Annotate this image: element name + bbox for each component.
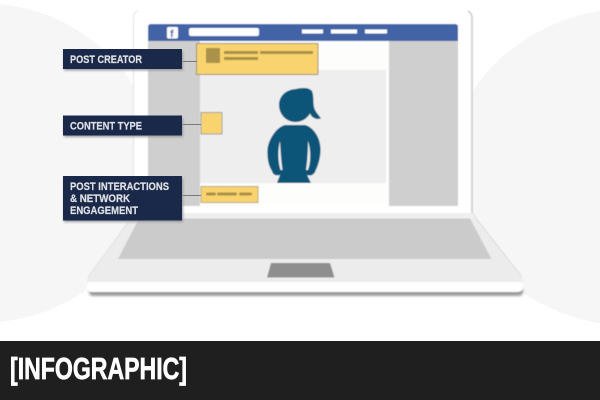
label: content type — [63, 116, 183, 137]
laptop base — [87, 213, 523, 296]
keyboard area — [118, 218, 492, 259]
icon: f logo: f — [170, 28, 174, 40]
laptop screen lid — [133, 10, 472, 213]
label: post interactions and network engagement: ENGAGEMENT — [70, 205, 138, 217]
social page: image area — [200, 70, 386, 183]
label: post interactions and network engagement: POST INTERACTIONS — [70, 181, 169, 193]
callout: interactions highlight — [201, 186, 258, 202]
head and ponytail — [279, 88, 321, 122]
arm gap: right — [306, 141, 310, 170]
connector: content type — [182, 124, 201, 126]
navigation bars — [302, 30, 387, 34]
search field — [189, 28, 259, 36]
background circle: right — [450, 7, 600, 327]
connector: post interactions — [182, 194, 201, 196]
laptop — [87, 10, 523, 296]
social page: left column — [148, 41, 200, 206]
label: post creator: POST CREATOR — [70, 54, 142, 66]
person silhouette — [267, 88, 321, 183]
social page: right column — [389, 41, 458, 206]
background circle: left — [0, 3, 155, 323]
text lines — [224, 51, 313, 60]
label: content type: CONTENT TYPE — [70, 120, 142, 132]
arm gap: left — [278, 141, 282, 170]
social page: header bar — [148, 24, 458, 41]
label: post interactions and network engagement: & NETWORK — [70, 193, 130, 205]
body with arms — [267, 125, 321, 183]
footer band — [0, 341, 600, 400]
avatar square — [206, 48, 220, 63]
callout: content type highlight — [201, 112, 222, 134]
action dashes — [206, 192, 252, 196]
label: post creator — [63, 49, 183, 70]
callout: post creator highlight — [196, 44, 318, 74]
icon: f logo — [167, 27, 178, 40]
label: post interactions and network engagement — [63, 176, 183, 222]
social page: centre column — [200, 41, 389, 206]
connector: post creator — [182, 60, 197, 62]
footer title: [INFOGRAPHIC] — [10, 351, 187, 386]
trackpad — [267, 263, 334, 278]
